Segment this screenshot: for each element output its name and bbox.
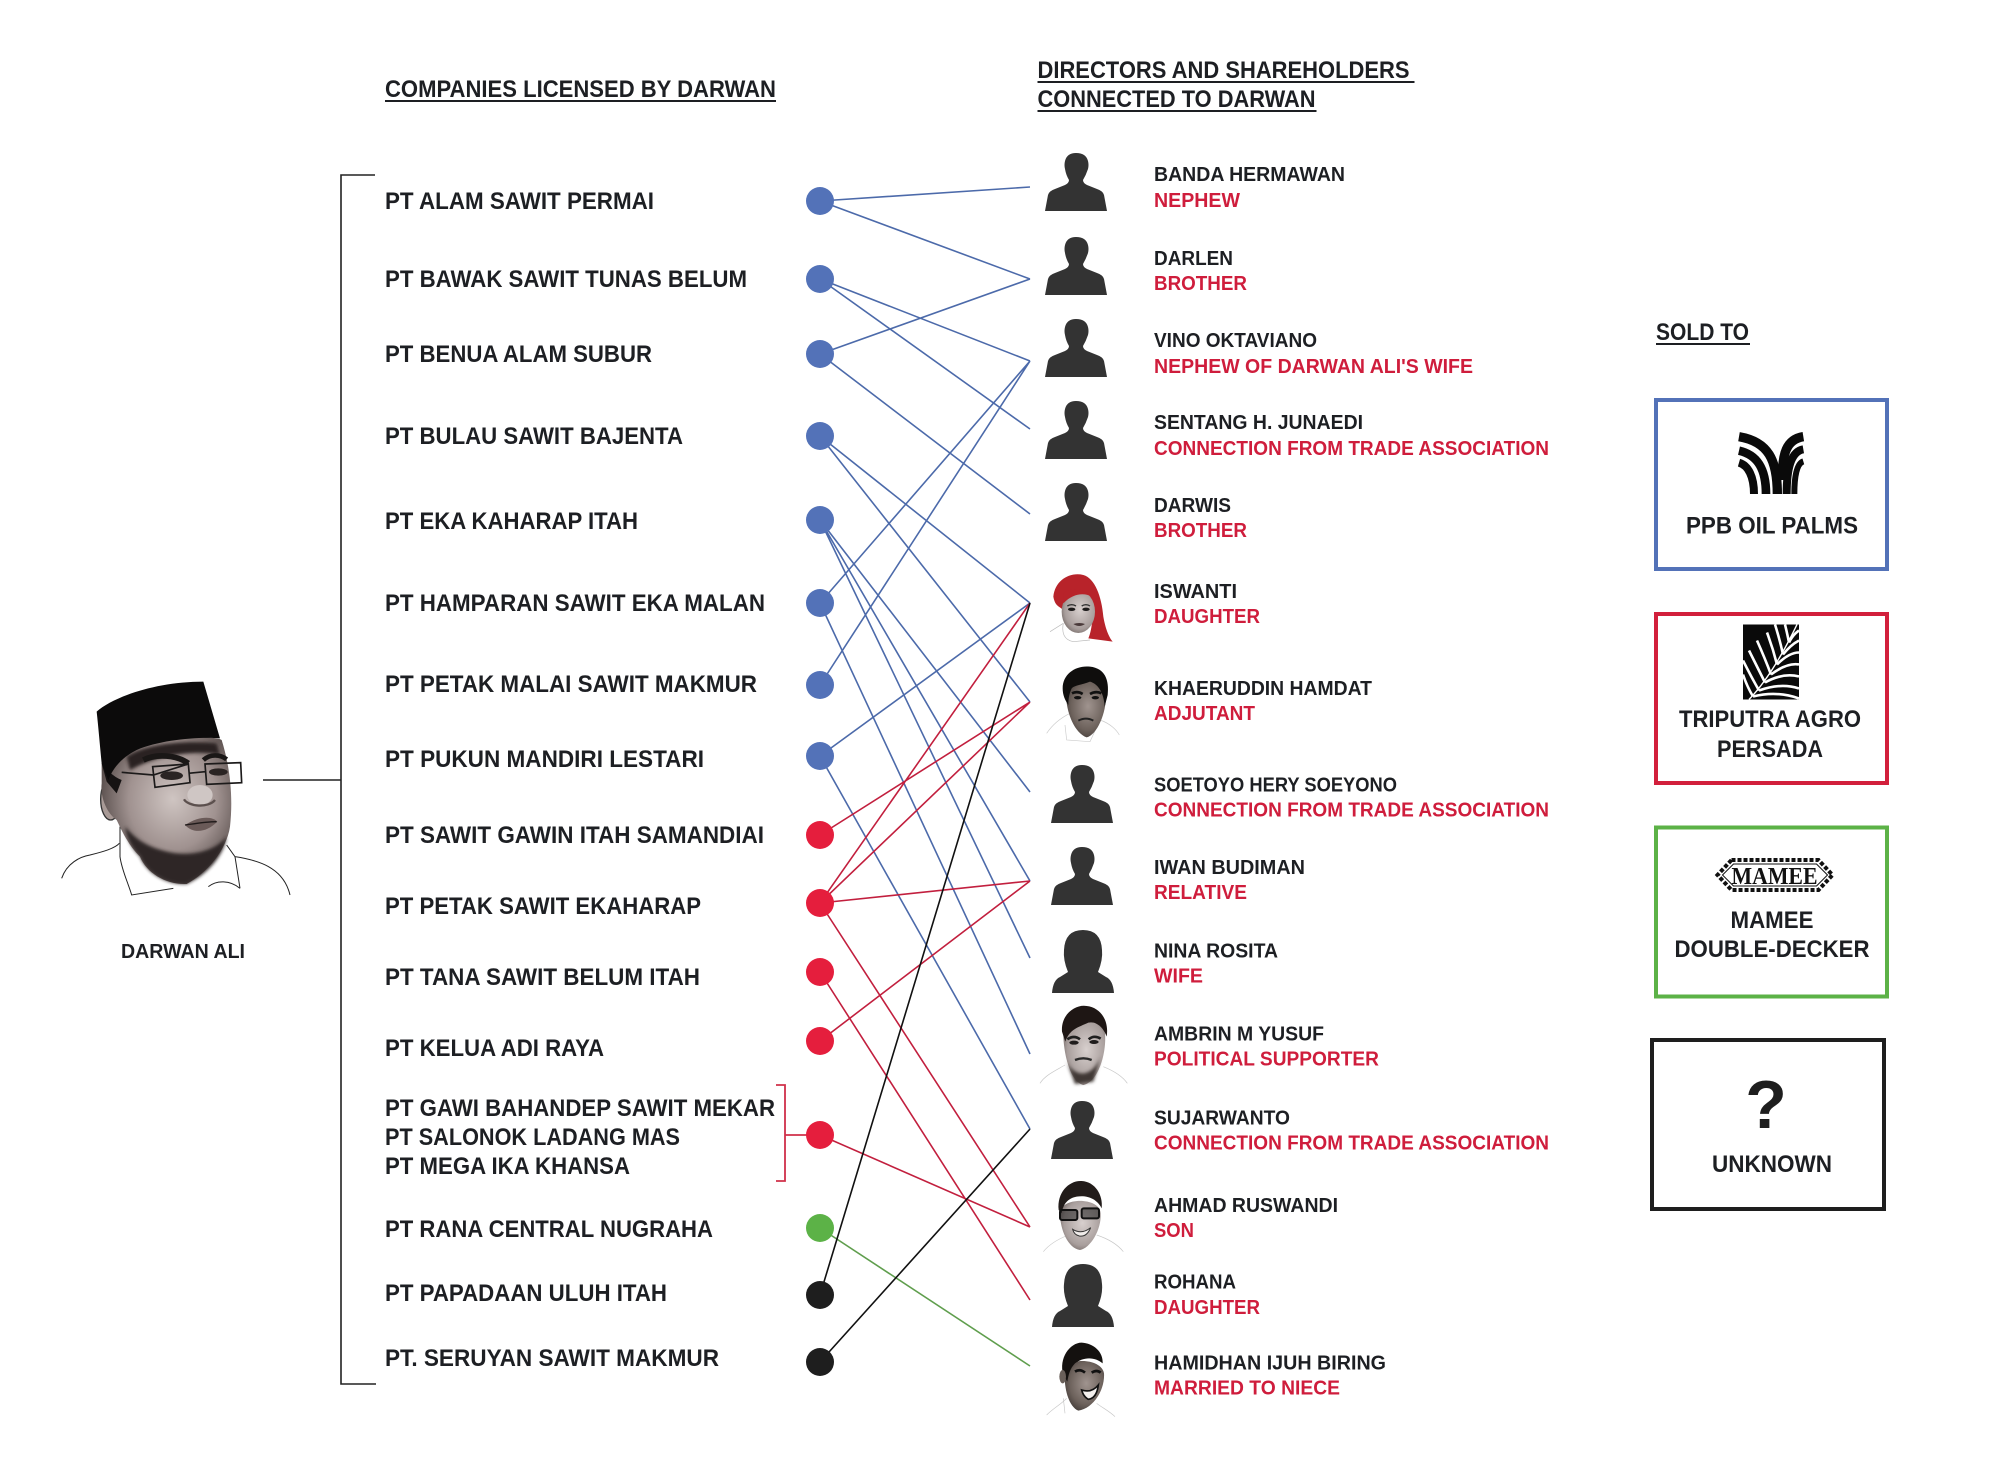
heading: directors and shareholders: DIRECTORS AND SHAREHOLDERS bbox=[1038, 57, 1410, 84]
company: PT Benua Alam Subur: PT BENUA ALAM SUBUR bbox=[385, 341, 652, 368]
portrait: Khaeruddin Hamdat bbox=[1047, 666, 1119, 742]
person: Soetoyo Hery Soeyono bbox=[1051, 765, 1549, 823]
name: Darwan Ali: DARWAN ALI bbox=[121, 940, 245, 963]
company: PT Gawi Bahandep Sawit Mekar: PT GAWI BAHANDEP SAWIT MEKAR bbox=[385, 1095, 775, 1122]
panel: sold to Triputra Agro Persada: TRIPUTRA AGRO bbox=[1679, 706, 1861, 733]
person: Khaeruddin Hamdat: KHAERUDDIN HAMDAT bbox=[1154, 677, 1372, 700]
panel: sold to PPB Oil Palms bbox=[1656, 400, 1887, 569]
portrait: Ahmad Ruswandi bbox=[1043, 1181, 1123, 1252]
company: PT Pukun Mandiri Lestari: PT PUKUN MANDIRI LESTARI bbox=[385, 746, 704, 773]
logo: Triputra Agro Persada bbox=[1743, 624, 1799, 700]
person: Hamidhan Ijuh Biring: HAMIDHAN IJUH BIRING bbox=[1154, 1352, 1386, 1374]
person: Sujarwanto bbox=[1051, 1101, 1549, 1159]
person: Vino Oktaviano bbox=[1045, 319, 1473, 378]
black connector lines bbox=[820, 603, 1030, 1362]
company: PT Kelua Adi Raya: PT KELUA ADI RAYA bbox=[385, 1035, 604, 1062]
heading: sold to: SOLD TO bbox=[1656, 319, 1749, 346]
person: Nina Rosita bbox=[1052, 930, 1278, 993]
person: Ambrin M Yusuf: AMBRIN M YUSUF bbox=[1154, 1022, 1324, 1046]
portrait: Ambrin M Yusuf bbox=[1040, 1006, 1127, 1085]
bracket: grouped red companies bbox=[776, 1085, 820, 1181]
panel: directors and shareholders bbox=[1040, 153, 1549, 1417]
panel: sold to unknown: UNKNOWN bbox=[1712, 1151, 1832, 1178]
portrait: Hamidhan Ijuh Biring bbox=[1047, 1343, 1115, 1417]
panel: sold to Mamee Double-Decker bbox=[1656, 828, 1887, 996]
person: Hamidhan Ijuh Biring bbox=[1047, 1343, 1386, 1417]
person: Ahmad Ruswandi: SON bbox=[1154, 1219, 1194, 1242]
bracket: Darwan to companies bbox=[263, 175, 376, 1384]
person: Iwan Budiman: RELATIVE bbox=[1154, 881, 1247, 904]
company: PT Eka Kaharap Itah: PT EKA KAHARAP ITAH bbox=[385, 508, 638, 535]
blue connector lines bbox=[820, 187, 1030, 1129]
red connector lines bbox=[820, 603, 1030, 1300]
company: PT Sawit Gawin Itah Samandiai: PT SAWIT GAWIN ITAH SAMANDIAI bbox=[385, 822, 764, 849]
person: Iwan Budiman: IWAN BUDIMAN bbox=[1154, 856, 1305, 879]
person: Iswanti: DAUGHTER bbox=[1154, 605, 1260, 628]
company dots bbox=[806, 187, 834, 1376]
green connector line bbox=[820, 1228, 1030, 1366]
black dots bbox=[806, 1281, 834, 1376]
panel: sold to unknown bbox=[1652, 1040, 1884, 1209]
icon: question mark: ? bbox=[1745, 1067, 1787, 1143]
heading: companies licensed by Darwan: COMPANIES LICENSED BY DARWAN bbox=[385, 76, 776, 103]
panel: sold to Mamee Double-Decker: MAMEE bbox=[1730, 907, 1814, 934]
person: Darwis: BROTHER bbox=[1154, 519, 1247, 542]
heading: directors and shareholders: CONNECTED TO DARWAN bbox=[1038, 86, 1316, 113]
person: Rohana: ROHANA bbox=[1154, 1270, 1236, 1294]
person: Banda Hermawan bbox=[1045, 153, 1345, 212]
person: Darlen bbox=[1045, 237, 1247, 295]
person: Sentang H. Junaedi: CONNECTION FROM TRADE ASSOCIATION bbox=[1154, 437, 1549, 460]
blue dots bbox=[806, 187, 834, 770]
person: Khaeruddin Hamdat: ADJUTANT bbox=[1154, 702, 1255, 725]
panel: company list bbox=[385, 188, 775, 1372]
person: Rohana bbox=[1052, 1264, 1260, 1327]
person: Soetoyo Hery Soeyono: SOETOYO HERY SOEYONO bbox=[1154, 774, 1397, 796]
person: Nina Rosita: NINA ROSITA bbox=[1154, 940, 1278, 962]
person: Vino Oktaviano: NEPHEW OF DARWAN ALI'S WIFE bbox=[1154, 355, 1473, 378]
panel: sold to Mamee Double-Decker: DOUBLE-DECKER bbox=[1674, 936, 1870, 963]
panel: sold to PPB Oil Palms: PPB OIL PALMS bbox=[1686, 512, 1858, 540]
person: Iswanti: ISWANTI bbox=[1154, 580, 1237, 603]
company: PT Mega Ika Khansa: PT MEGA IKA KHANSA bbox=[385, 1153, 630, 1180]
person: Darlen: DARLEN bbox=[1154, 247, 1233, 270]
company: PT Tana Sawit Belum Itah: PT TANA SAWIT BELUM ITAH bbox=[385, 964, 700, 991]
panel: sold to Triputra Agro Persada bbox=[1656, 614, 1887, 783]
company: PT Rana Central Nugraha: PT RANA CENTRAL NUGRAHA bbox=[385, 1216, 713, 1243]
person: Vino Oktaviano: VINO OKTAVIANO bbox=[1154, 329, 1317, 352]
person: Nina Rosita: WIFE bbox=[1154, 964, 1203, 988]
green dot bbox=[806, 1214, 834, 1242]
connector lines bbox=[820, 187, 1030, 1366]
company: PT. Seruyan Sawit Makmur: PT. SERUYAN SAWIT MAKMUR bbox=[385, 1345, 719, 1372]
company: PT Salonok Ladang Mas: PT SALONOK LADANG MAS bbox=[385, 1124, 680, 1151]
portrait: Darwan Ali bbox=[62, 682, 290, 895]
person: Rohana: DAUGHTER bbox=[1154, 1296, 1260, 1319]
company: PT Bulau Sawit Bajenta: PT BULAU SAWIT BAJENTA bbox=[385, 423, 683, 450]
person: Khaeruddin Hamdat bbox=[1047, 666, 1372, 742]
company: PT Petak Malai Sawit Makmur: PT PETAK MALAI SAWIT MAKMUR bbox=[385, 671, 757, 698]
panel: sold to Triputra Agro Persada: PERSADA bbox=[1717, 736, 1823, 763]
person: Darwis: DARWIS bbox=[1154, 494, 1231, 517]
company: PT Petak Sawit Ekaharap: PT PETAK SAWIT EKAHARAP bbox=[385, 893, 701, 920]
red dots bbox=[806, 821, 834, 1149]
person: Sentang H. Junaedi bbox=[1045, 401, 1549, 460]
person: Darlen: BROTHER bbox=[1154, 272, 1247, 295]
person: Sentang H. Junaedi: SENTANG H. JUNAEDI bbox=[1154, 411, 1363, 434]
person: Ahmad Ruswandi: AHMAD RUSWANDI bbox=[1154, 1194, 1338, 1217]
person: Ahmad Ruswandi bbox=[1043, 1181, 1338, 1252]
company: PT Papadaan Uluh Itah: PT PAPADAAN ULUH ITAH bbox=[385, 1280, 667, 1307]
person: Sujarwanto: CONNECTION FROM TRADE ASSOCIATION bbox=[1154, 1132, 1549, 1154]
logo: Mamee: MAMEE bbox=[1732, 864, 1818, 890]
person: Ambrin M Yusuf: POLITICAL SUPPORTER bbox=[1154, 1048, 1379, 1070]
company: PT Alam Sawit Permai: PT ALAM SAWIT PERMAI bbox=[385, 188, 654, 215]
company: PT Hamparan Sawit Eka Malan: PT HAMPARAN SAWIT EKA MALAN bbox=[385, 590, 765, 617]
person: Iwan Budiman bbox=[1051, 847, 1305, 905]
logo: PPB bbox=[1739, 437, 1803, 494]
person: Soetoyo Hery Soeyono: CONNECTION FROM TRADE ASSOCIATION bbox=[1154, 798, 1549, 822]
person: Banda Hermawan: NEPHEW bbox=[1154, 189, 1241, 212]
person: Darwis bbox=[1045, 483, 1247, 542]
person: Ambrin M Yusuf bbox=[1040, 1006, 1379, 1085]
heading: directors and shareholders bbox=[1038, 57, 1414, 113]
portrait: Iswanti bbox=[1050, 574, 1113, 642]
company: PT Bawak Sawit Tunas Belum: PT BAWAK SAWIT TUNAS BELUM bbox=[385, 266, 747, 293]
person: Iswanti bbox=[1050, 574, 1260, 642]
person: Sujarwanto: SUJARWANTO bbox=[1154, 1106, 1290, 1130]
person: Banda Hermawan: BANDA HERMAWAN bbox=[1154, 163, 1345, 186]
person: Hamidhan Ijuh Biring: MARRIED TO NIECE bbox=[1154, 1376, 1340, 1400]
